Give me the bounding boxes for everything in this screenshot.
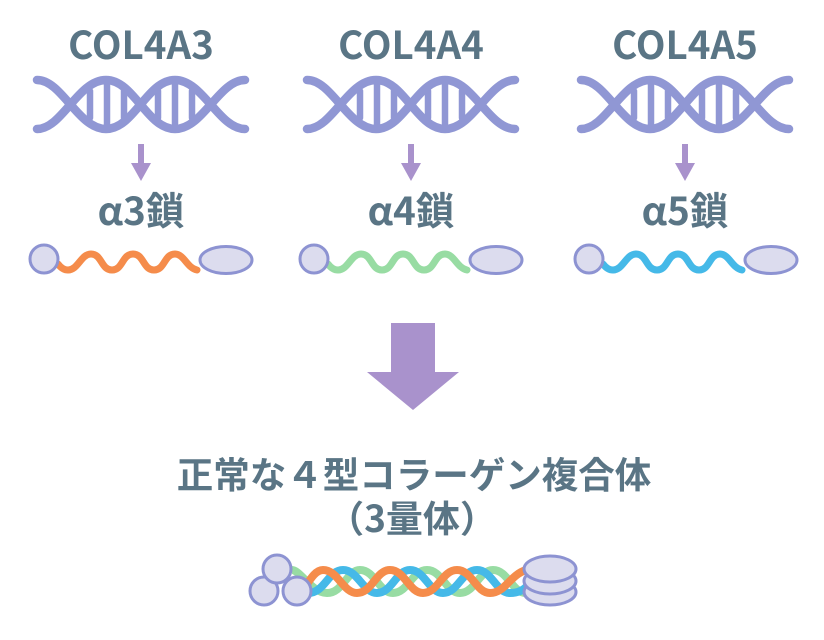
arrow: COL4A5 to alpha5 [675,144,695,181]
chain: alpha5 [575,245,797,274]
label: alpha5 chain: α5鎖 [642,181,728,237]
illustration: triple helix [250,555,528,605]
subtitle: trimer: （3量体） [327,489,497,543]
chain: alpha4 [300,245,522,274]
icon: three globular heads [250,555,311,605]
arrow: COL4A4 to alpha4 [401,144,421,181]
heading: COL4A4: COL4A4 [338,15,484,71]
arrow: large down arrow [367,323,459,410]
icon: DNA COL4A4 [307,80,515,129]
chain: alpha3 [30,245,252,274]
label: alpha3 chain: α3鎖 [98,181,184,237]
heading: COL4A3: COL4A3 [68,15,214,71]
heading: COL4A5: COL4A5 [612,15,758,71]
label: alpha4 chain: α4鎖 [368,181,454,237]
icon: three stacked discs [524,556,576,605]
title: normal type IV collagen complex: 正常な４型コラーゲン複合体 [177,446,652,499]
icon: DNA COL4A3 [37,80,245,129]
arrow: COL4A3 to alpha3 [131,144,151,181]
icon: DNA COL4A5 [581,80,789,129]
